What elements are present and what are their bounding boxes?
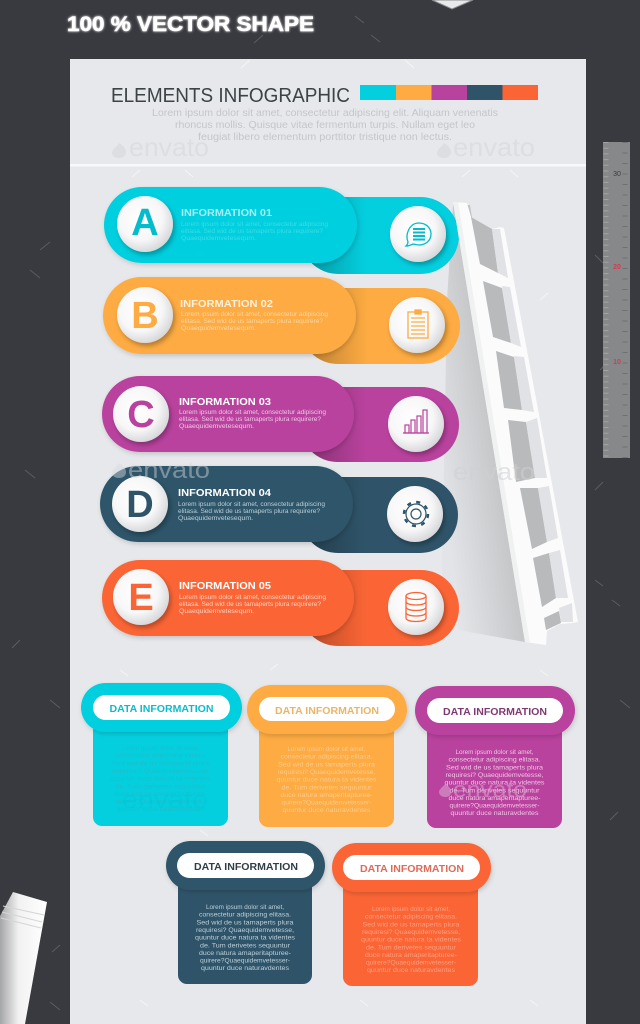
card text: quuntur duce naturavdentes	[116, 806, 205, 813]
icon badge: gear	[387, 486, 443, 542]
body text E	[179, 595, 326, 615]
intro text: rhoncus mollis. Quisque vitae fermentum turpis. Nullam eget leo	[175, 120, 475, 131]
body text E: Quaequidemvetesequm.	[179, 609, 254, 615]
heading: information 02: INFORMATION 02	[180, 298, 273, 310]
body text B: Lorem ipsum dolor sit amet, consectetur adipiscing	[181, 312, 328, 318]
intro text: Lorem ipsum dolor sit amet, consectetur adipiscing elit. Aliquam venenatis	[152, 108, 498, 119]
body text C: Lorem ipsum dolor sit amet, consectetur adipiscing	[179, 410, 326, 416]
card header	[415, 686, 575, 735]
front pill B	[103, 277, 356, 354]
card text: de. Tum derivetes sequuntur	[282, 784, 372, 791]
header label pill	[177, 853, 314, 878]
icon badge: clipboard	[389, 297, 445, 353]
card body	[427, 717, 562, 828]
card text	[276, 746, 377, 814]
header label pill	[427, 698, 563, 723]
card 5: red-orange	[332, 843, 491, 986]
intro text: feugiat libero elementum porttitor tristique non lectus.	[198, 132, 452, 143]
card text: quuntur duce natura ta videntes	[276, 777, 377, 784]
card text: requiresi? Quaequidemvetesse,	[446, 772, 544, 779]
card text: quuntur duce natura ta videntes	[444, 780, 545, 787]
card text: quuntur duce natura ta videntes	[195, 935, 296, 942]
back pill A	[300, 197, 459, 274]
letter badge B: B	[131, 295, 159, 337]
card text: Sed wid de us tamaperts plura	[196, 919, 294, 926]
body text C: Quaequidemvetesequm.	[179, 424, 254, 430]
body text C: elitasa. Sed wid de us tamaperts plura requirere?	[179, 417, 322, 423]
card text: de. Tum derivetes sequuntur	[450, 787, 540, 794]
watermark: envato middle left: envato	[128, 457, 210, 484]
card header	[81, 683, 242, 732]
icon badge: speech bubble	[390, 206, 446, 262]
row D	[100, 466, 458, 553]
header label pill: DATA INFORMATION	[360, 863, 464, 875]
letter badge C	[113, 386, 169, 442]
body text B: elitasa. Sed wid de us tamaperts plura requirere?	[181, 319, 324, 325]
letter badge B	[117, 287, 173, 343]
watermark: envato on cyan card: envato	[122, 787, 208, 814]
back pill E	[300, 570, 459, 646]
letter badge D: D	[126, 484, 154, 526]
watermark: envato right: envato	[453, 132, 535, 162]
heading: information 05: INFORMATION 05	[179, 580, 271, 592]
ruler: 30	[613, 171, 621, 178]
intro text	[152, 108, 498, 143]
panel: main sheet	[70, 59, 586, 1024]
header label pill: DATA INFORMATION	[194, 861, 298, 873]
front pill E	[102, 560, 354, 636]
card text: de. Tum derivetes sequuntur	[116, 783, 206, 790]
card text: requiresi? Quaequidemvetesse,	[112, 768, 210, 775]
body text D	[178, 502, 325, 522]
card text: Sed wid de us tamaperts plura	[278, 761, 375, 768]
row A	[104, 187, 459, 274]
card body	[343, 875, 478, 986]
card text: requiresi? Quaequidemvetesse,	[196, 927, 294, 934]
legend: colour bar	[360, 85, 538, 100]
card text: Sed wid de us tamaperts plura	[112, 760, 209, 767]
ruler: 20	[613, 264, 621, 271]
card text: quirere?Quaequidemvetesser-	[366, 960, 456, 967]
card text: Lorem ipsum dolor sit amet,	[288, 746, 366, 753]
letter badge A	[117, 196, 173, 252]
card text	[110, 745, 211, 813]
letter badge C: C	[127, 394, 155, 436]
ladder wall shadow	[442, 205, 535, 642]
body text D: elitasa. Sed wid de us tamaperts plura requirere?	[178, 509, 321, 515]
card header	[332, 843, 491, 892]
header label pill	[93, 695, 230, 720]
letter badge E	[113, 569, 169, 625]
card 2: orange	[247, 685, 407, 827]
card body	[178, 873, 312, 984]
card text: duce natura amaperitapturee-	[448, 795, 540, 802]
heading: information 03: INFORMATION 03	[179, 396, 271, 408]
card text: Lorem ipsum dolor sit amet,	[122, 745, 200, 752]
card header	[247, 685, 407, 734]
card text: de. Tum derivetes sequuntur	[366, 944, 457, 951]
card text: quirere?Quaequidemvetesser-	[200, 958, 290, 965]
heading: information 04: INFORMATION 04	[178, 487, 271, 499]
header label pill	[343, 855, 480, 880]
back pill B	[300, 288, 460, 364]
heading: information 01: INFORMATION 01	[181, 207, 272, 219]
card text: consectetur adipiscing elitasa.	[199, 912, 291, 919]
title: ELEMENTS INFOGRAPHIC	[111, 85, 350, 107]
front pill D	[100, 466, 353, 542]
watermark: envato left: envato	[129, 132, 209, 162]
body text D: Quaequidemvetesequm.	[178, 516, 253, 522]
header label pill: DATA INFORMATION	[275, 705, 379, 717]
card 3: purple	[415, 686, 575, 828]
card text	[195, 904, 296, 972]
row C	[102, 376, 459, 462]
card text	[361, 906, 462, 974]
card header	[166, 841, 325, 890]
card text: quuntur duce natura ta videntes	[110, 776, 211, 783]
card text: duce natura amaperitapturee-	[365, 952, 457, 959]
icon badge: bar chart	[388, 396, 444, 452]
card text: duce natura amaperitapturee-	[114, 791, 206, 798]
ruler: 10	[613, 359, 621, 366]
row E	[102, 560, 459, 646]
card text: Lorem ipsum dolor sit amet,	[372, 906, 450, 913]
front pill C	[102, 376, 354, 452]
card text: quuntur duce naturavdentes	[201, 965, 290, 972]
card text: de. Tum derivetes sequuntur	[200, 942, 291, 949]
header label pill: DATA INFORMATION	[110, 703, 214, 715]
heading: 100 % vector shape: 100 % VECTOR SHAPE	[67, 13, 314, 36]
letter badge D	[112, 476, 168, 532]
card text: Lorem ipsum dolor sit amet,	[206, 904, 284, 911]
card text: Sed wid de us tamaperts plura	[362, 921, 460, 928]
body text A: Quaequidemvetesequm.	[181, 236, 256, 242]
card text: quirere?Quaequidemvetesser-	[450, 803, 540, 810]
watermark: envato middle right: envato	[453, 459, 535, 486]
watermark: envato on card: envato	[453, 777, 527, 802]
row B	[103, 277, 460, 364]
card text: Sed wid de us tamaperts plura	[446, 764, 543, 771]
body text A: Lorem ipsum dolor sit amet, consectetur adipiscing	[181, 222, 328, 228]
ladder	[453, 202, 578, 645]
card text: duce natura amaperitapturee-	[280, 792, 372, 799]
back pill C	[300, 387, 459, 462]
back pill D	[300, 477, 458, 553]
card text: requiresi? Quaequidemvetesse,	[278, 769, 376, 776]
header label pill	[259, 697, 395, 721]
front pill A	[104, 187, 357, 263]
card text: quuntur duce naturavdentes	[367, 967, 456, 974]
icon badge: database	[388, 579, 444, 635]
body text E: Lorem ipsum dolor sit amet, consectetur adipiscing	[179, 595, 326, 601]
icon: top badge corner	[432, 0, 473, 9]
card body	[93, 715, 228, 826]
card text: consectetur adipiscing elitasa.	[448, 757, 541, 764]
body text E: elitasa. Sed wid de us tamaperts plura requirere?	[179, 602, 322, 608]
body text D: Lorem ipsum dolor sit amet, consectetur adipiscing	[178, 502, 325, 508]
card text: consectetur adipiscing elitasa.	[114, 753, 207, 760]
paper roll	[0, 892, 47, 1024]
letter badge A: A	[131, 202, 159, 244]
card text: consectetur adipiscing elitasa.	[365, 914, 457, 921]
card 4: navy	[166, 841, 325, 984]
ruler	[603, 142, 630, 458]
header label pill: DATA INFORMATION	[443, 706, 547, 718]
card body	[259, 716, 394, 827]
body text A	[181, 222, 328, 242]
card text: quirere?Quaequidemvetesser-	[282, 800, 372, 807]
card text	[444, 749, 545, 817]
card text: quirere?Quaequidemvetesser-	[116, 799, 206, 806]
card text: Lorem ipsum dolor sit amet,	[456, 749, 534, 756]
card text: quuntur duce natura ta videntes	[361, 937, 462, 944]
letter badge E: E	[128, 577, 154, 619]
card text: duce natura amaperitapturee-	[199, 950, 291, 957]
body text A: elitasa. Sed wid de us tamaperts plura requirere?	[181, 229, 324, 235]
body text B: Quaequidemvetesequm.	[181, 326, 256, 332]
card text: quuntur duce naturavdentes	[450, 810, 539, 817]
card text: requiresi? Quaequidemvetesse,	[362, 929, 460, 936]
card text: consectetur adipiscing elitasa.	[280, 754, 373, 761]
card 1: cyan	[81, 683, 242, 826]
body text B	[181, 312, 328, 332]
card text: quuntur duce naturavdentes	[282, 807, 371, 814]
body text C	[179, 410, 326, 430]
